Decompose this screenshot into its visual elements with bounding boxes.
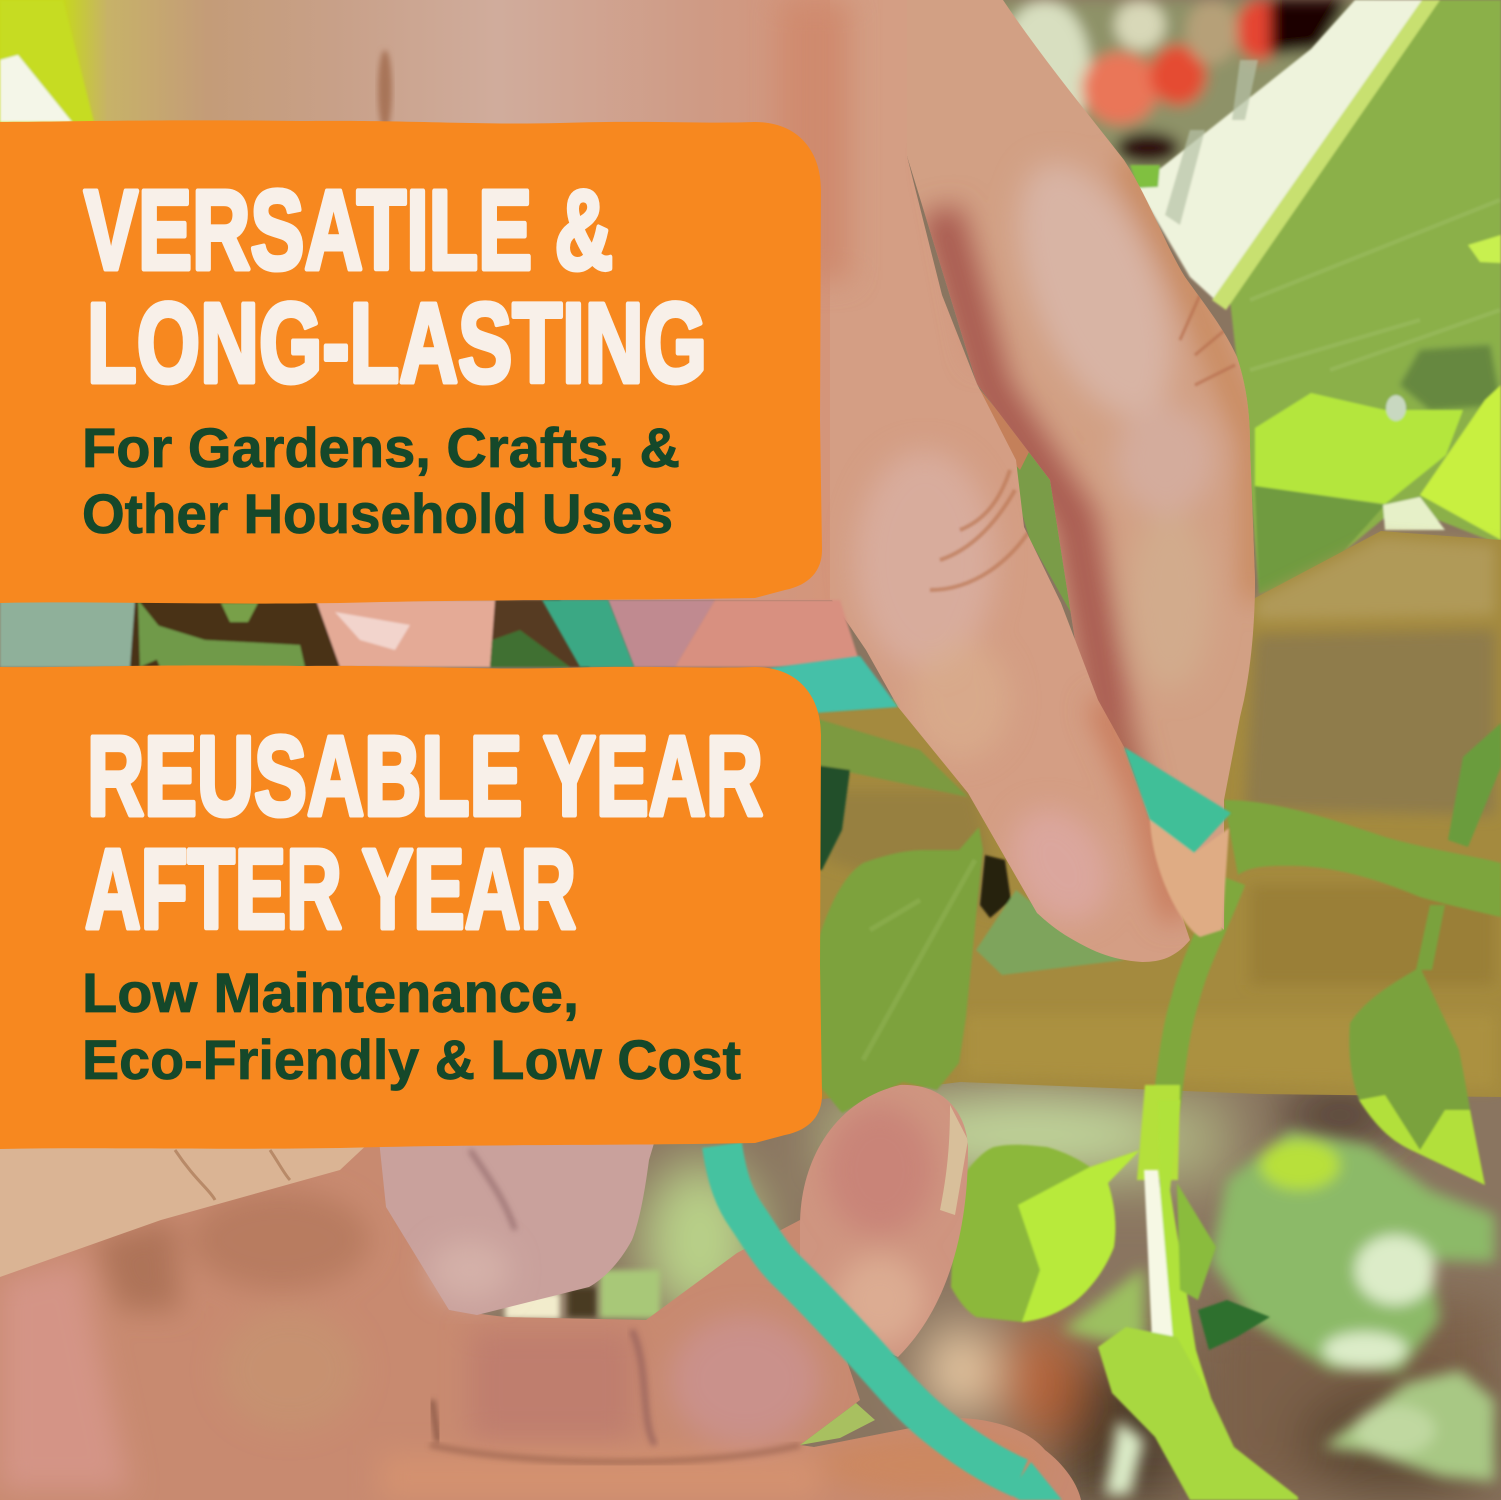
fingers showing between panels: [0, 600, 861, 667]
middle finger: [907, 0, 1255, 930]
small green gap below thumb: [800, 1403, 875, 1445]
text: low maintenance, eco-friendly and low cost: Low Maintenance,: [82, 961, 579, 1024]
heading: versatile and long-lasting: LONG-LASTING: [87, 280, 707, 406]
curled finger: [379, 1140, 655, 1315]
heading: reusable year after year: [85, 713, 763, 952]
tie end and fingernail: [1124, 747, 1231, 937]
yellow-green leaf at top left: [0, 0, 94, 122]
heading: versatile and long-lasting: VERSATILE &: [84, 167, 613, 293]
lower palm: [0, 1130, 1100, 1500]
panel: reusable year after year: [0, 665, 822, 1149]
text: for gardens, crafts and other household uses: For Gardens, Crafts, &: [82, 416, 680, 479]
back of hand at left: [0, 1140, 372, 1277]
wooden stake: [815, 531, 1501, 1100]
text: for gardens, crafts and other household uses: [82, 416, 680, 545]
blurred leaves: [1062, 1130, 1495, 1495]
large sunlit tomato leaf: [1130, 0, 1501, 594]
teal tie cord upper: [542, 600, 898, 713]
text: for gardens, crafts and other household uses: Other Household Uses: [82, 482, 673, 545]
sharp bright leaves: [951, 1100, 1298, 1500]
teal tie cord lower: [722, 1145, 1062, 1500]
heading: reusable year after year: REUSABLE YEAR: [87, 713, 763, 839]
text: low maintenance, eco-friendly and low cost: [82, 961, 741, 1091]
heading: versatile and long-lasting: [84, 167, 707, 406]
leaves lower right: [951, 1100, 1495, 1500]
plant stems and small leaves: [815, 718, 1501, 1185]
panel background: [0, 665, 822, 1149]
background details under curled finger: [505, 1270, 660, 1319]
text: low maintenance, eco-friendly and low cost: Eco-Friendly & Low Cost: [82, 1028, 741, 1091]
third finger and green wedge between fingers: [1000, 440, 1075, 620]
panel background: [0, 120, 822, 604]
index finger and top of hand: [0, 0, 1220, 980]
panel: versatile and long-lasting: [0, 120, 822, 604]
out-of-focus fruit and foliage at top: [980, 0, 1380, 190]
thumb tip: [800, 1084, 968, 1357]
heading: reusable year after year: AFTER YEAR: [85, 826, 576, 952]
